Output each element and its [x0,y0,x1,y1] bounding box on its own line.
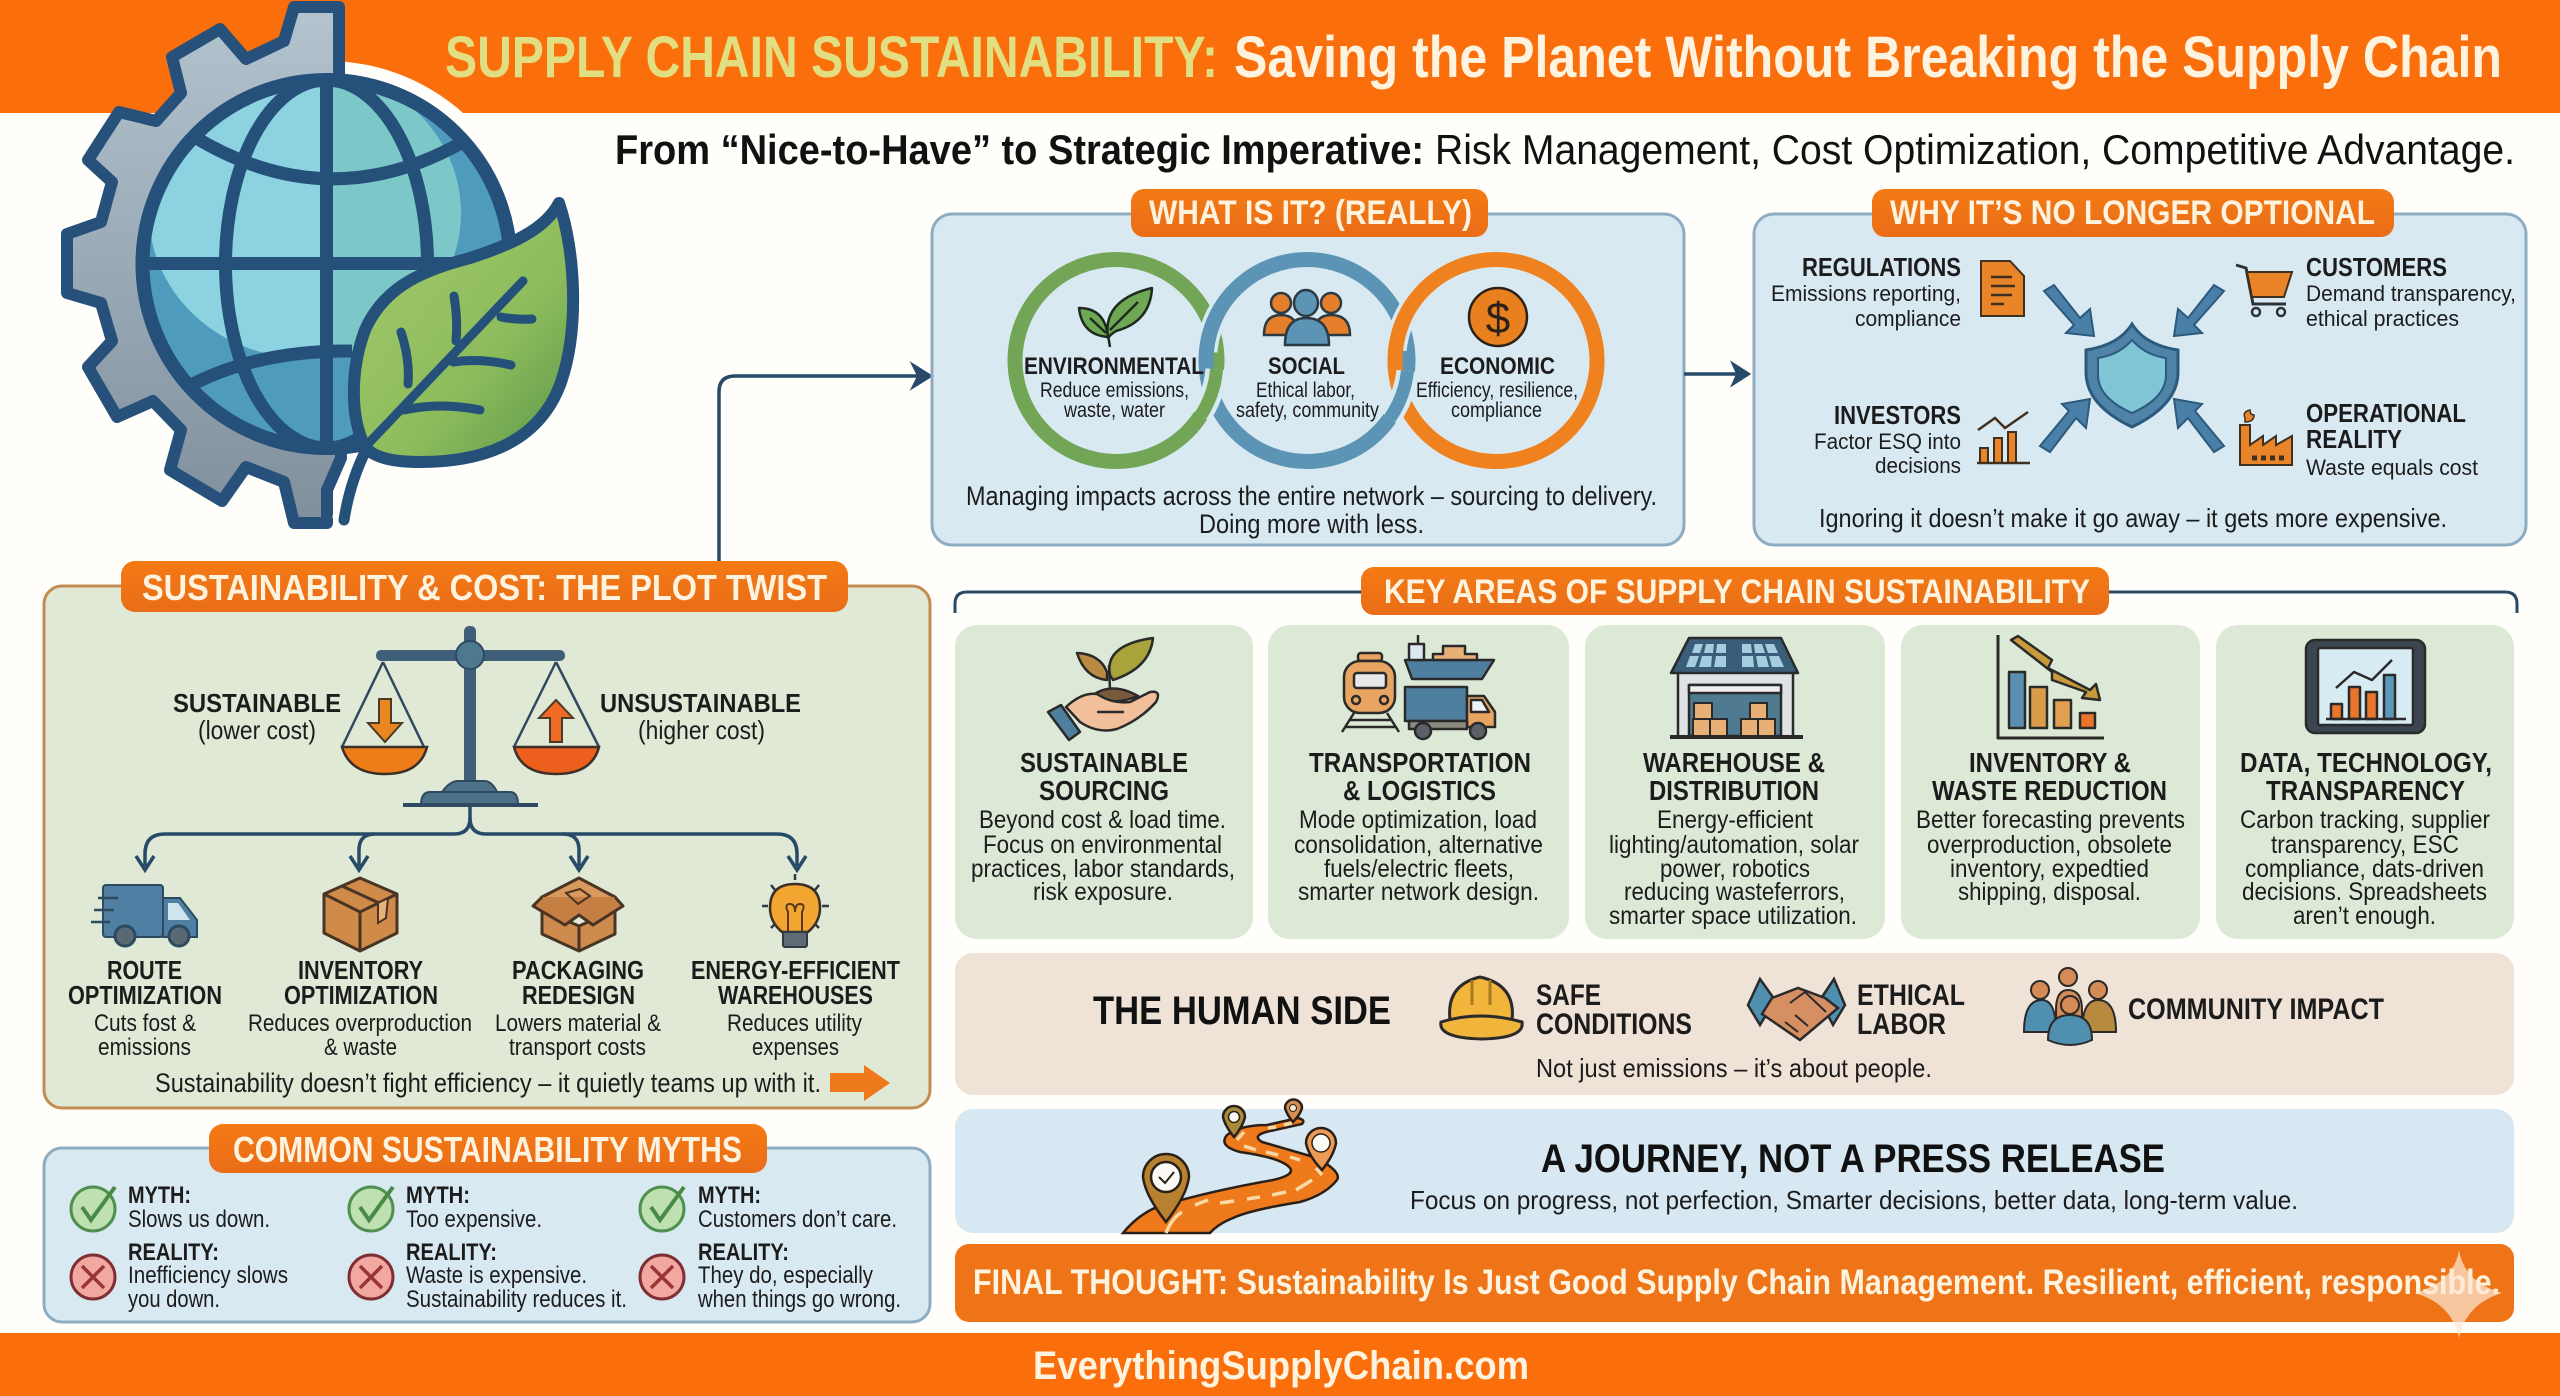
card: data, technology, transparency [2216,625,2514,939]
icon: gear, globe and leaf logo [67,7,573,523]
card: data, technology, transparency: TRANSPARENCY [2266,775,2465,806]
panel: what is it [932,189,1684,545]
operational reality: Waste equals cost [2306,455,2478,480]
card: data, technology, transparency: compliance, dats-driven [2245,855,2484,883]
item: packaging redesign: PACKAGING [512,955,644,985]
operational reality: REALITY [2306,424,2402,454]
icon: train, ship and truck [1342,635,1495,739]
myth column 1: REALITY: [128,1239,219,1266]
regulations: compliance [1855,306,1961,331]
caption: Sustainability doesn’t fight efficiency – it quietly teams up with it. [155,1068,821,1098]
regulations: REGULATIONS [1802,252,1961,282]
panel: why it's no longer optional [1754,189,2526,545]
item: route optimization [68,885,222,1061]
card: warehouse and distribution: reducing wasteferrors, [1624,878,1845,906]
panel: a journey, not a press release [955,1100,2514,1233]
heading badge: KEY AREAS OF SUPPLY CHAIN SUSTAINABILITY [1384,573,2090,611]
investors: decisions [1875,453,1961,478]
myth column 3: MYTH: [698,1182,761,1209]
icon: tablet with chart [2306,640,2425,733]
subtitle: From “Nice-to-Have” to Strategic Imperative: [615,126,1424,173]
item: route optimization: ROUTE [107,955,182,985]
icon: hand with sprout [1048,638,1158,740]
item: packaging redesign: Lowers material & [495,1010,661,1037]
ethical labor [1748,979,1965,1041]
myth column 3: They do, especially [698,1262,873,1289]
card: inventory and waste reduction: inventory, expedtied [1950,855,2149,883]
branching arrows [136,806,806,870]
myth column 2: Sustainability reduces it. [406,1286,627,1313]
myth column 3: Customers don’t care. [698,1206,897,1233]
ethical labor: LABOR [1857,1008,1946,1041]
item: energy-efficient warehouses: WAREHOUSES [718,980,873,1010]
operational reality: OPERATIONAL [2306,398,2466,428]
investors [1814,400,2030,478]
myth column 3: REALITY: [698,1239,789,1266]
ring content: social: Ethical labor, [1256,379,1355,402]
footer banner: EverythingSupplyChain.com [1033,1344,1529,1388]
card: warehouse and distribution: WAREHOUSE & [1643,747,1825,778]
investors: Factor ESQ into [1814,429,1961,454]
scale label: sustainable: SUSTAINABLE [173,688,341,718]
item: energy-efficient warehouses: Reduces utility [727,1010,862,1037]
card: sustainable sourcing [955,625,1253,939]
heading badge: WHAT IS IT? (REALLY) [1149,194,1472,232]
icon: declining bar chart [1998,635,2104,738]
ring content: environmental [1024,288,1204,422]
arrow: orange [830,1065,890,1101]
card: warehouse and distribution [1585,625,1885,939]
card: inventory and waste reduction: INVENTORY & [1969,747,2131,778]
myth column 2: Too expensive. [406,1206,542,1233]
ring content: economic: compliance [1451,399,1542,422]
safe conditions [1441,977,1692,1041]
ring content: social: SOCIAL [1268,353,1345,380]
card: sustainable sourcing: practices, labor standards, [971,855,1235,883]
myth column 2: MYTH: [406,1182,470,1209]
item: packaging redesign: REDESIGN [522,980,635,1010]
card: transportation and logistics: smarter network design. [1298,878,1539,906]
caption: Not just emissions – it’s about people. [1536,1053,1932,1083]
card: inventory and waste reduction: shipping, disposal. [1958,878,2141,906]
card: data, technology, transparency: aren’t enough. [2293,902,2436,930]
arrow: what is it to why optional [1684,365,1748,383]
card: inventory and waste reduction [1901,625,2200,939]
panel: common myths [44,1124,930,1322]
panel: sustainability and cost [44,561,930,1108]
ring content: social: safety, community [1236,399,1379,422]
ring content: environmental: ENVIRONMENTAL [1024,353,1204,380]
card: warehouse and distribution: power, robotics [1660,855,1810,883]
item: packaging redesign [495,878,661,1061]
scale label: unsustainable: UNSUSTAINABLE [600,688,801,718]
myth column 2: Waste is expensive. [406,1262,587,1289]
ethical labor: ETHICAL [1857,979,1965,1012]
heading badge: SUSTAINABILITY & COST: THE PLOT TWIST [142,567,827,608]
card: warehouse and distribution: Energy-efficient [1657,806,1813,834]
card: inventory and waste reduction: Better forecasting prevents [1916,806,2185,834]
investors: INVESTORS [1834,400,1961,430]
card: transportation and logistics: Mode optimization, load [1299,806,1537,834]
subtitle [615,126,2515,173]
myth column 1: Inefficiency slows [128,1262,288,1289]
card: inventory and waste reduction: WASTE REDUCTION [1932,775,2167,806]
myth column 1: you down. [128,1286,220,1313]
sparkle watermark [2415,1250,2502,1338]
icon: shield [2086,324,2178,427]
item: inventory optimization: OPTIMIZATION [284,980,438,1010]
myth column 3: when things go wrong. [697,1286,901,1313]
globe [142,68,510,448]
ring content: economic: ECONOMIC [1440,353,1555,380]
icon: warehouse with solar roof [1670,638,1803,737]
caption: Ignoring it doesn’t make it go away – it gets more expensive. [1819,503,2447,533]
ring content: environmental: Reduce emissions, [1040,379,1189,402]
regulations [1771,252,2024,331]
myth column 3 [640,1182,901,1313]
card: transportation and logistics [1268,625,1569,939]
myth column 2: REALITY: [406,1239,497,1266]
heading badge: COMMON SUSTAINABILITY MYTHS [233,1129,742,1170]
scale label: sustainable [173,688,341,745]
card: transportation and logistics: consolidation, alternative [1294,831,1543,859]
card: transportation and logistics: fuels/electric fleets, [1324,855,1514,883]
leaf [344,203,573,520]
customers: CUSTOMERS [2306,252,2447,282]
caption: Focus on progress, not perfection, Smarter decisions, better data, long-term value. [1410,1185,2298,1215]
title [445,25,2502,90]
card: sustainable sourcing: Beyond cost & load time. [979,806,1226,834]
card: data, technology, transparency: transparency, ESC [2271,831,2459,859]
heading: THE HUMAN SIDE [1093,989,1391,1033]
item: route optimization: OPTIMIZATION [68,980,222,1010]
regulations: Emissions reporting, [1771,281,1961,306]
item: inventory optimization: Reduces overproduction [248,1010,472,1037]
operational reality [2240,398,2478,480]
caption: Managing impacts across the entire network – sourcing to delivery. [966,481,1657,511]
panel: the human side [955,953,2514,1095]
card: sustainable sourcing: Focus on environmental [983,831,1222,859]
item: packaging redesign: transport costs [509,1034,646,1061]
card: sustainable sourcing: risk exposure. [1033,878,1173,906]
item: energy-efficient warehouses: ENERGY-EFFICIENT [691,955,900,985]
arrow: connector plot twist to what is it [719,366,930,562]
customers [2236,252,2516,331]
caption: Doing more with less. [1199,509,1424,539]
item: energy-efficient warehouses: expenses [752,1034,839,1061]
heading: A JOURNEY, NOT A PRESS RELEASE [1541,1137,2165,1181]
card: transportation and logistics: TRANSPORTATION [1309,747,1531,778]
header banner [0,0,2560,113]
section: key areas [955,567,2517,939]
ring content: social [1236,290,1379,422]
heading badge: WHY IT’S NO LONGER OPTIONAL [1890,194,2375,232]
card: inventory and waste reduction: overproduction, obsolete [1927,831,2172,859]
community impact [2024,968,2384,1045]
myth column 1: MYTH: [128,1182,191,1209]
scale [342,626,599,805]
card: warehouse and distribution: smarter space utilization. [1609,902,1857,930]
gear [67,7,341,523]
item: route optimization: emissions [98,1034,191,1061]
item: inventory optimization: & waste [324,1034,397,1061]
footer banner [0,1333,2560,1396]
safe conditions: CONDITIONS [1536,1008,1692,1041]
customers: Demand transparency, [2306,281,2516,306]
card: data, technology, transparency: Carbon tracking, supplier [2240,806,2490,834]
icon: winding road with pins [1123,1100,1338,1233]
myth column 2 [349,1182,627,1313]
title: SUPPLY CHAIN SUSTAINABILITY: [445,25,1218,90]
scale label: unsustainable [600,688,801,745]
scale label: unsustainable: (higher cost) [638,715,765,745]
scale label: sustainable: (lower cost) [198,715,316,745]
caption [966,481,1657,539]
ring content: economic: $ [1486,294,1510,343]
card: transportation and logistics: & LOGISTICS [1343,775,1496,806]
panel: final thought [955,1244,2514,1322]
card: warehouse and distribution: DISTRIBUTION [1649,775,1819,806]
ring content: economic [1416,288,1578,422]
card: warehouse and distribution: lighting/automation, solar [1609,831,1859,859]
arrows into shield [2040,285,2224,452]
ring content: economic: Efficiency, resilience, [1416,379,1578,402]
safe conditions: SAFE [1536,979,1601,1012]
item: inventory optimization [248,878,472,1061]
item: energy-efficient warehouses [691,874,900,1061]
item: route optimization: Cuts fost & [94,1010,196,1037]
card: sustainable sourcing: SOURCING [1039,775,1169,806]
customers: ethical practices [2306,306,2459,331]
interlocked rings [1015,260,1597,462]
myth column 1: Slows us down. [128,1206,270,1233]
community impact: COMMUNITY IMPACT [2128,993,2384,1026]
myth column 1 [71,1182,288,1313]
item: inventory optimization: INVENTORY [298,955,423,985]
card: data, technology, transparency: decisions. Spreadsheets [2242,878,2487,906]
ring content: environmental: waste, water [1063,399,1165,422]
card: sustainable sourcing: SUSTAINABLE [1020,747,1188,778]
card: data, technology, transparency: DATA, TECHNOLOGY, [2240,747,2492,778]
